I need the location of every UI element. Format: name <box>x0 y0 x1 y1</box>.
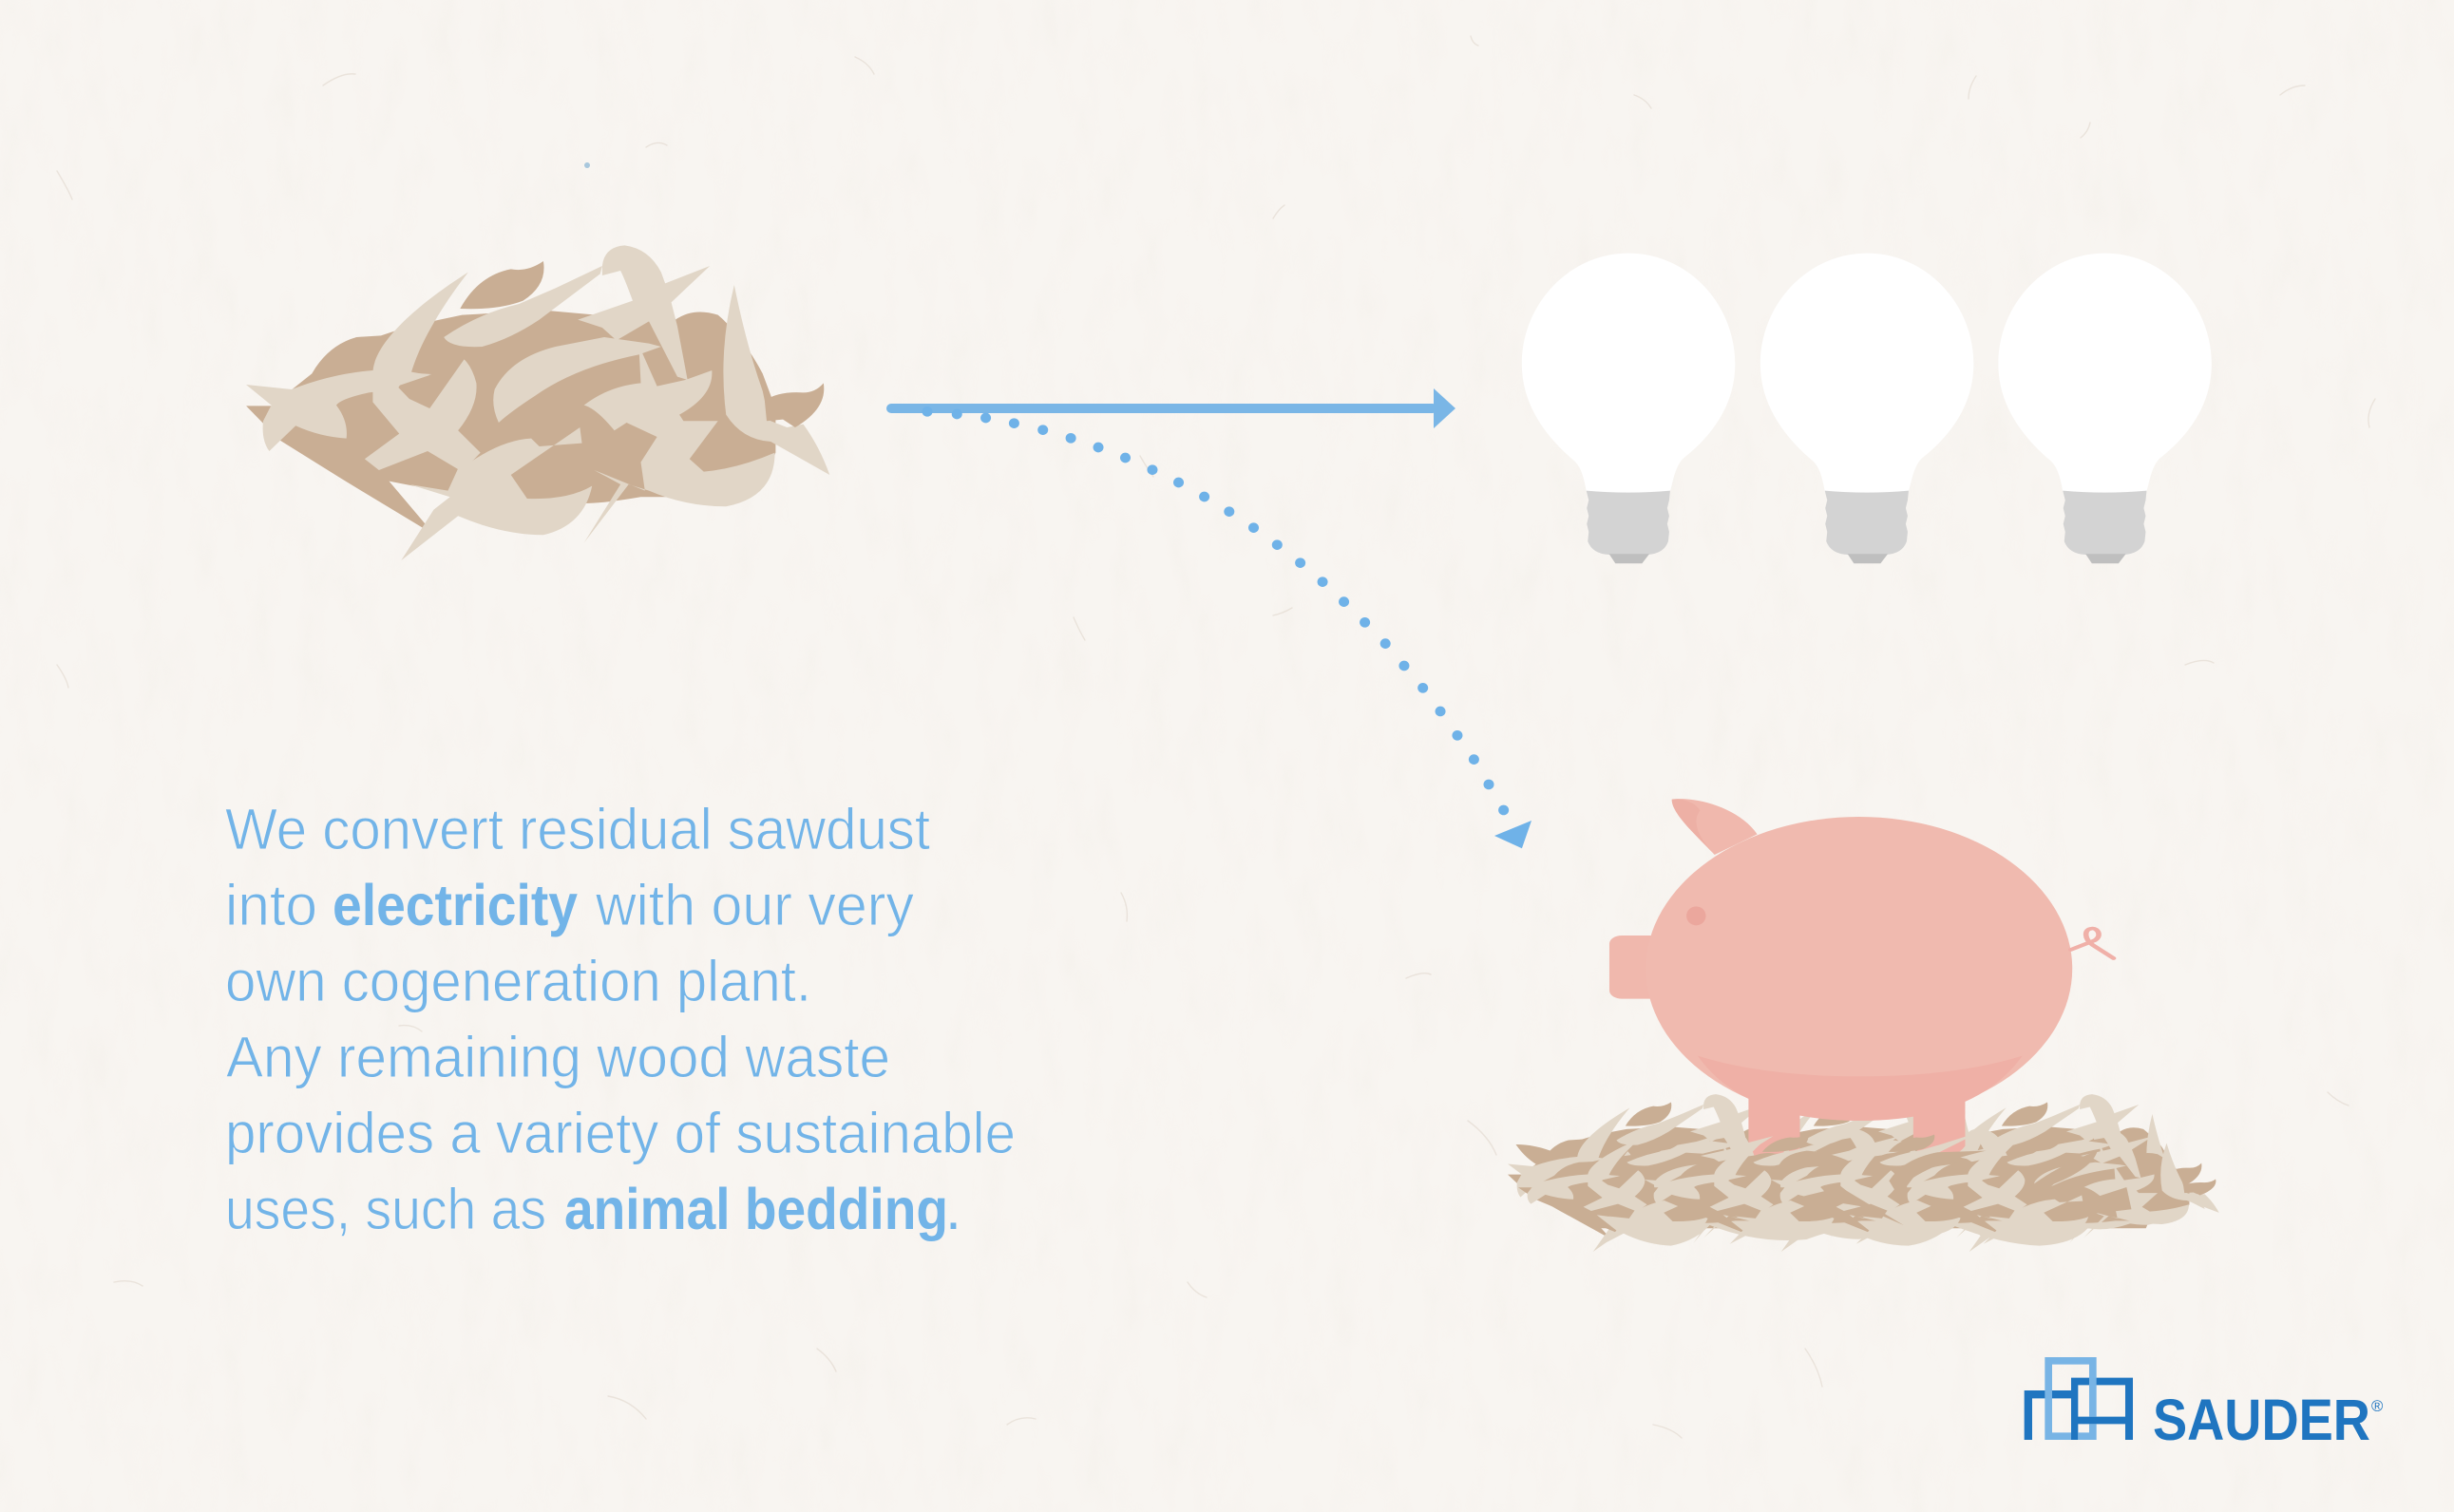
text block: description: uses, such as <box>225 1177 546 1241</box>
arrow: dotted to pig <box>923 406 1531 848</box>
text block: description: own cogeneration plant. <box>225 949 811 1013</box>
dark sawdust mass <box>246 311 775 535</box>
pig snout <box>1609 936 1672 999</box>
pig eye <box>1686 906 1706 925</box>
icon: three light bulbs <box>1522 254 2212 563</box>
text block: description <box>225 797 1016 1241</box>
pig belly shadow <box>1698 1056 2023 1121</box>
bedding front row <box>1518 1128 2219 1244</box>
icon: sawdust pile <box>246 245 829 560</box>
bedding back row <box>1508 1094 2205 1252</box>
bulb 2 <box>1760 254 1973 563</box>
logo: Sauder <box>2025 1357 2384 1452</box>
text block: description: We convert residual sawdust <box>225 797 930 861</box>
dark top flake <box>460 261 544 309</box>
text block: description: electricity <box>333 873 578 937</box>
text block: description: into <box>225 873 317 937</box>
pig ear <box>1672 799 1758 855</box>
text block: description: with our very <box>595 873 914 937</box>
bedding scalloped lower edge <box>1588 1181 2170 1246</box>
illustration: pig on bedding <box>1508 799 2219 1252</box>
pig <box>1609 799 2114 1162</box>
logo wordmark: SAUDER <box>2153 1388 2370 1452</box>
pig body <box>1646 817 2072 1121</box>
pig inner ear <box>1672 799 1715 855</box>
bulb 3 <box>1998 254 2212 563</box>
bedding dark accents <box>1778 1151 2131 1225</box>
arrow: solid to light bulbs <box>886 388 1455 428</box>
bulb 1 <box>1522 254 1735 563</box>
registered mark: ® <box>2371 1397 2384 1415</box>
light flakes <box>246 245 829 560</box>
pig legs <box>1748 1086 1965 1162</box>
pig tail <box>2071 929 2114 958</box>
logo mark <box>2025 1357 2133 1440</box>
bedding dark base <box>1516 1133 2170 1228</box>
text block: description: Any remaining wood waste <box>226 1025 890 1089</box>
text block: description: . <box>945 1177 961 1241</box>
dark tail flake <box>765 383 824 427</box>
text block: description: provides a variety of sustainable <box>225 1101 1016 1165</box>
text block: description: animal bedding <box>564 1177 948 1241</box>
